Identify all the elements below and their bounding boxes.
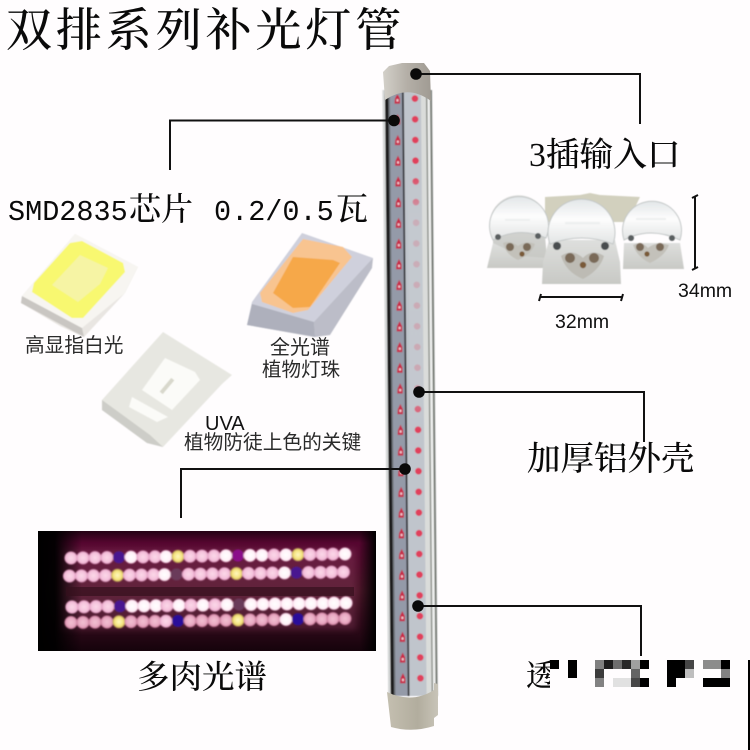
heading: cover, first character: 透	[526, 660, 556, 693]
tube body	[382, 90, 438, 696]
arrow: aluminium shell callout	[413, 386, 644, 442]
heading: chip spec: 芯片	[128, 191, 193, 227]
dimension: height	[678, 195, 732, 302]
heading: succulent spectrum: 多肉光谱	[137, 659, 267, 696]
label: 32mm: 32mm	[555, 311, 609, 333]
label: 34mm: 34mm	[678, 280, 732, 302]
icon: UVA LED chip	[102, 332, 232, 447]
heading: chip spec: SMD2835	[8, 196, 128, 229]
icon: white LED chip	[21, 234, 138, 337]
heading: chip spec: 瓦	[336, 191, 368, 227]
panel: LED tube	[382, 63, 438, 730]
LED beads	[393, 95, 427, 691]
title: 双排系列补光灯管	[6, 5, 405, 56]
arrow: input port callout	[410, 68, 640, 124]
image: three socket ends	[487, 193, 684, 284]
label: full spectrum	[262, 336, 340, 381]
label: high CRI white: 高显指白光	[25, 335, 123, 357]
icon: top end cap	[383, 63, 431, 101]
arrow: cover callout	[412, 600, 641, 656]
label: full spectrum: 植物灯珠	[262, 359, 340, 381]
label: UVA: UVA	[205, 413, 245, 435]
icon: bottom end cap	[387, 683, 438, 730]
centre socket	[542, 199, 621, 284]
arrow: spectrum callout	[181, 463, 411, 518]
heading: aluminium shell: 加厚铝外壳	[527, 441, 694, 478]
panel: LED spectrum photo	[38, 531, 376, 651]
socket back	[545, 193, 640, 222]
icon: orange LED chip	[247, 233, 373, 337]
arrow: SMD chip callout	[170, 115, 400, 170]
right socket	[622, 201, 684, 269]
dimension: width	[539, 294, 623, 333]
left socket	[487, 195, 549, 268]
label: full spectrum: 全光谱	[270, 336, 330, 359]
label: UVA: 植物防徒上色的关键	[184, 432, 361, 454]
label: UVA	[184, 413, 361, 454]
mosaic: censored text blocks	[550, 657, 750, 750]
heading: input port: 3插输入口	[529, 136, 681, 174]
heading: chip spec: 0.2/0.5	[214, 196, 334, 229]
